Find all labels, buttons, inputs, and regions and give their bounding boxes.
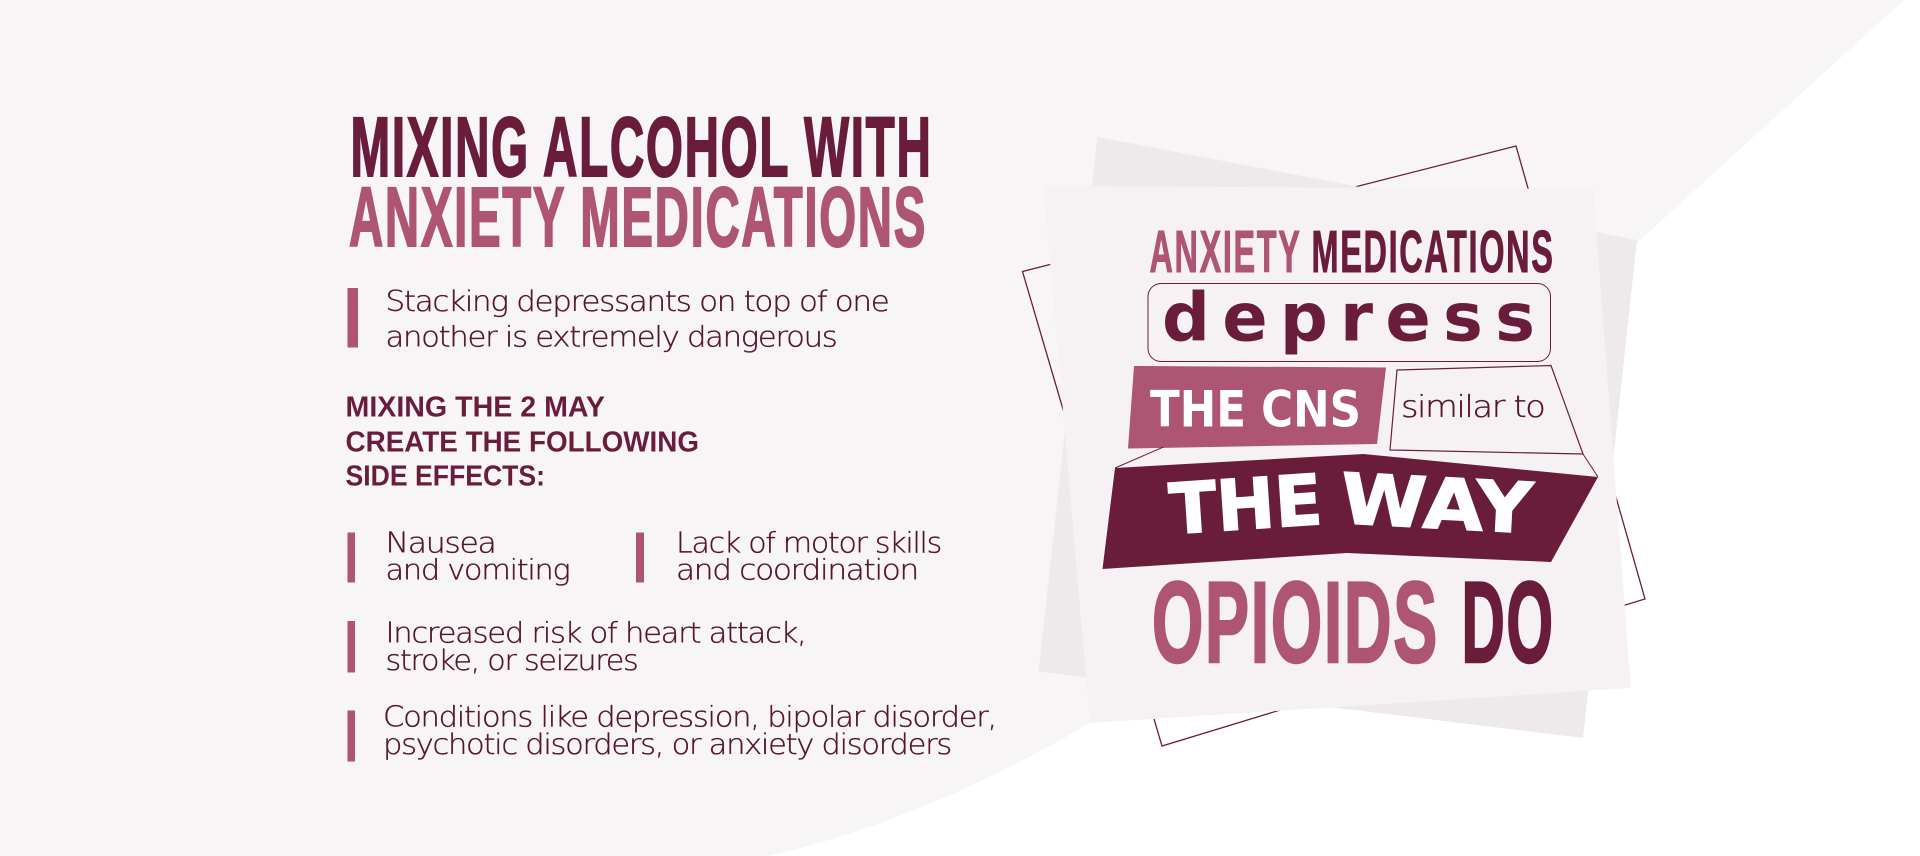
side effect: conditions [348, 700, 996, 762]
front sheet [1044, 186, 1631, 723]
outline sheet [1022, 146, 1645, 746]
side effect: nausea: Nausea [386, 526, 496, 560]
subheading: CREATE THE FOLLOWING [346, 426, 699, 458]
connector line [1115, 447, 1164, 468]
title [349, 100, 932, 264]
side effect: motor skills: Lack of motor skills [676, 526, 941, 560]
subheading: MIXING THE 2 MAY [346, 392, 605, 424]
back sheet [1038, 137, 1637, 738]
heading: anxiety medications [1150, 219, 1554, 285]
side effect: heart attack: stroke, or seizures [386, 644, 638, 677]
label: the way [1102, 454, 1598, 569]
label: the way: THE [1167, 459, 1325, 551]
intro statement: Stacking depressants on top of one [386, 285, 888, 318]
side effect: nausea: and vomiting [386, 554, 570, 586]
label: similar to [1390, 366, 1598, 477]
side effect: conditions: psychotic disorders, or anxiety disorders [383, 728, 951, 761]
subheading: SIDE EFFECTS: [346, 460, 545, 492]
heading: anxiety medications: ANXIETY [1150, 219, 1302, 285]
heading: anxiety medications: MEDICATIONS [1312, 219, 1554, 285]
side effect: heart attack: Increased risk of heart attack, [386, 616, 806, 650]
heading: opioids do: DO [1462, 559, 1554, 687]
title: ANXIETY MEDICATIONS [349, 170, 927, 264]
label: the CNS: THE CNS [1150, 380, 1361, 438]
side effect: conditions: Conditions like depression, bipolar disorder, [383, 700, 996, 734]
panel: stacked paper card [1022, 137, 1645, 746]
side effect: nausea [348, 526, 570, 586]
label: depress: depress [1162, 278, 1535, 356]
panel: left text column [346, 100, 996, 762]
label: similar to: similar to [1401, 390, 1544, 425]
intro statement: another is extremely dangerous [386, 320, 836, 354]
label: the way: WAY [1339, 458, 1536, 550]
title: MIXING ALCOHOL WITH [350, 100, 932, 194]
intro statement [348, 285, 888, 354]
subheading [346, 392, 699, 492]
label: the CNS [1128, 366, 1386, 448]
side effect: motor skills [636, 526, 941, 586]
heading: opioids do: OPIOIDS [1152, 559, 1439, 687]
side effect: heart attack [348, 616, 806, 677]
side effect: motor skills: and coordination [676, 554, 918, 586]
